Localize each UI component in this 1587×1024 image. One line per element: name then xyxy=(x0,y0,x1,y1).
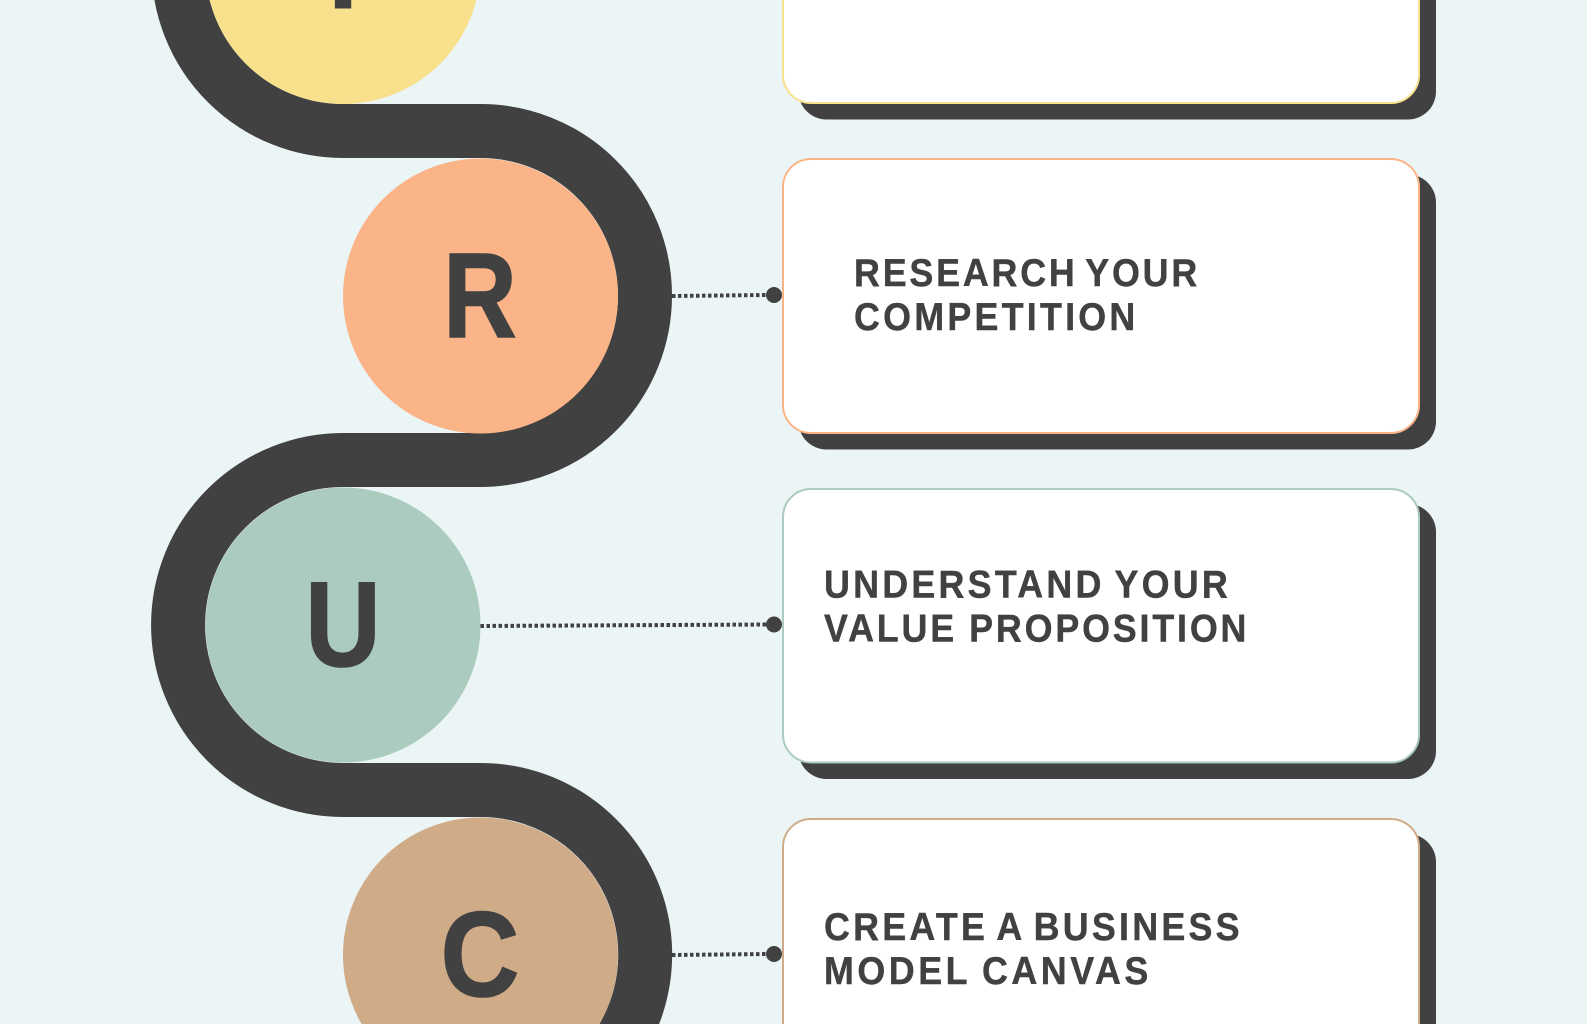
step circle: T xyxy=(206,0,480,104)
card: create a business model canvas: MODEL CANVAS xyxy=(824,949,1152,992)
step circle: C: C xyxy=(441,888,519,1022)
card: create a business model canvas: CREATE A BUSINESS xyxy=(824,905,1243,948)
card: T step xyxy=(783,0,1436,120)
card: create a business model canvas xyxy=(783,819,1436,1024)
card: research your competition xyxy=(783,159,1436,450)
card: understand your value proposition: VALUE PROPOSITION xyxy=(824,606,1249,650)
step circle: U xyxy=(206,488,480,762)
step circle: R: R xyxy=(443,228,517,363)
card: research your competition: COMPETITION xyxy=(854,295,1139,338)
card: understand your value proposition: UNDERSTAND YOUR xyxy=(824,562,1231,606)
step circle: R xyxy=(343,158,618,434)
step circle: U: U xyxy=(305,557,381,692)
connector: C xyxy=(672,946,782,962)
step circle: C xyxy=(343,817,618,1024)
winding path xyxy=(178,0,672,1024)
card: research your competition: RESEARCH YOUR xyxy=(854,251,1200,294)
connector: R xyxy=(672,287,782,303)
card: understand your value proposition xyxy=(783,489,1436,779)
connector: U xyxy=(480,616,782,632)
